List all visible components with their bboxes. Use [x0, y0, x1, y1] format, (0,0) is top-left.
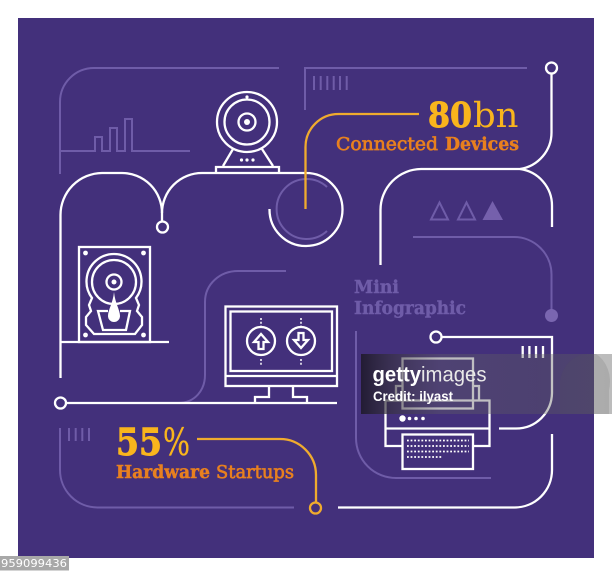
faint inner circle arc [277, 179, 327, 239]
main white connector: top left [60, 173, 342, 378]
image id tag: 959099436 [1, 558, 67, 570]
orange connector: 80bn [306, 114, 419, 209]
watermark band: gettyimages [372, 364, 486, 386]
stat: 55% hardware startups: Startups [216, 463, 294, 483]
white line under monitor [55, 398, 337, 408]
stat: 80bn connected devices: Connected [336, 135, 438, 155]
faint top-right bracket with ticks [305, 68, 527, 110]
stat: 80bn connected devices: 80 [428, 95, 472, 136]
white connector: printer top [430, 332, 552, 428]
stat: 80bn connected devices [336, 95, 519, 155]
faint connector to monitor [178, 271, 286, 403]
white connector: bottom right [338, 434, 552, 508]
stat: 80bn connected devices: bn [473, 96, 518, 136]
white connector: top right [380, 62, 557, 265]
watermark band [361, 354, 612, 414]
orange connector: 55% [197, 439, 321, 514]
faint bottom-left frame with ticks [60, 428, 294, 508]
heading: mini infographic [354, 278, 466, 319]
faint frame around printer [356, 331, 491, 478]
icon: monitor [226, 306, 337, 403]
stat: 55% hardware startups: % [163, 421, 190, 464]
icon: webcam [216, 92, 279, 173]
icon: printer [386, 358, 490, 469]
heading: mini infographic: Mini [354, 278, 399, 298]
icon: hard drive [60, 247, 169, 342]
stat: 55% hardware startups [116, 420, 294, 483]
faint frame with bar chart [60, 68, 279, 174]
heading: mini infographic: Infographic [354, 299, 466, 319]
faint connector with dot [413, 237, 558, 322]
stat: 55% hardware startups: 55 [116, 420, 162, 464]
stat: 80bn connected devices: Devices [445, 135, 519, 155]
icon: triangles [431, 201, 503, 220]
stat: 55% hardware startups: Hardware [116, 463, 210, 483]
watermark band: Credit: ilyast [373, 388, 453, 404]
